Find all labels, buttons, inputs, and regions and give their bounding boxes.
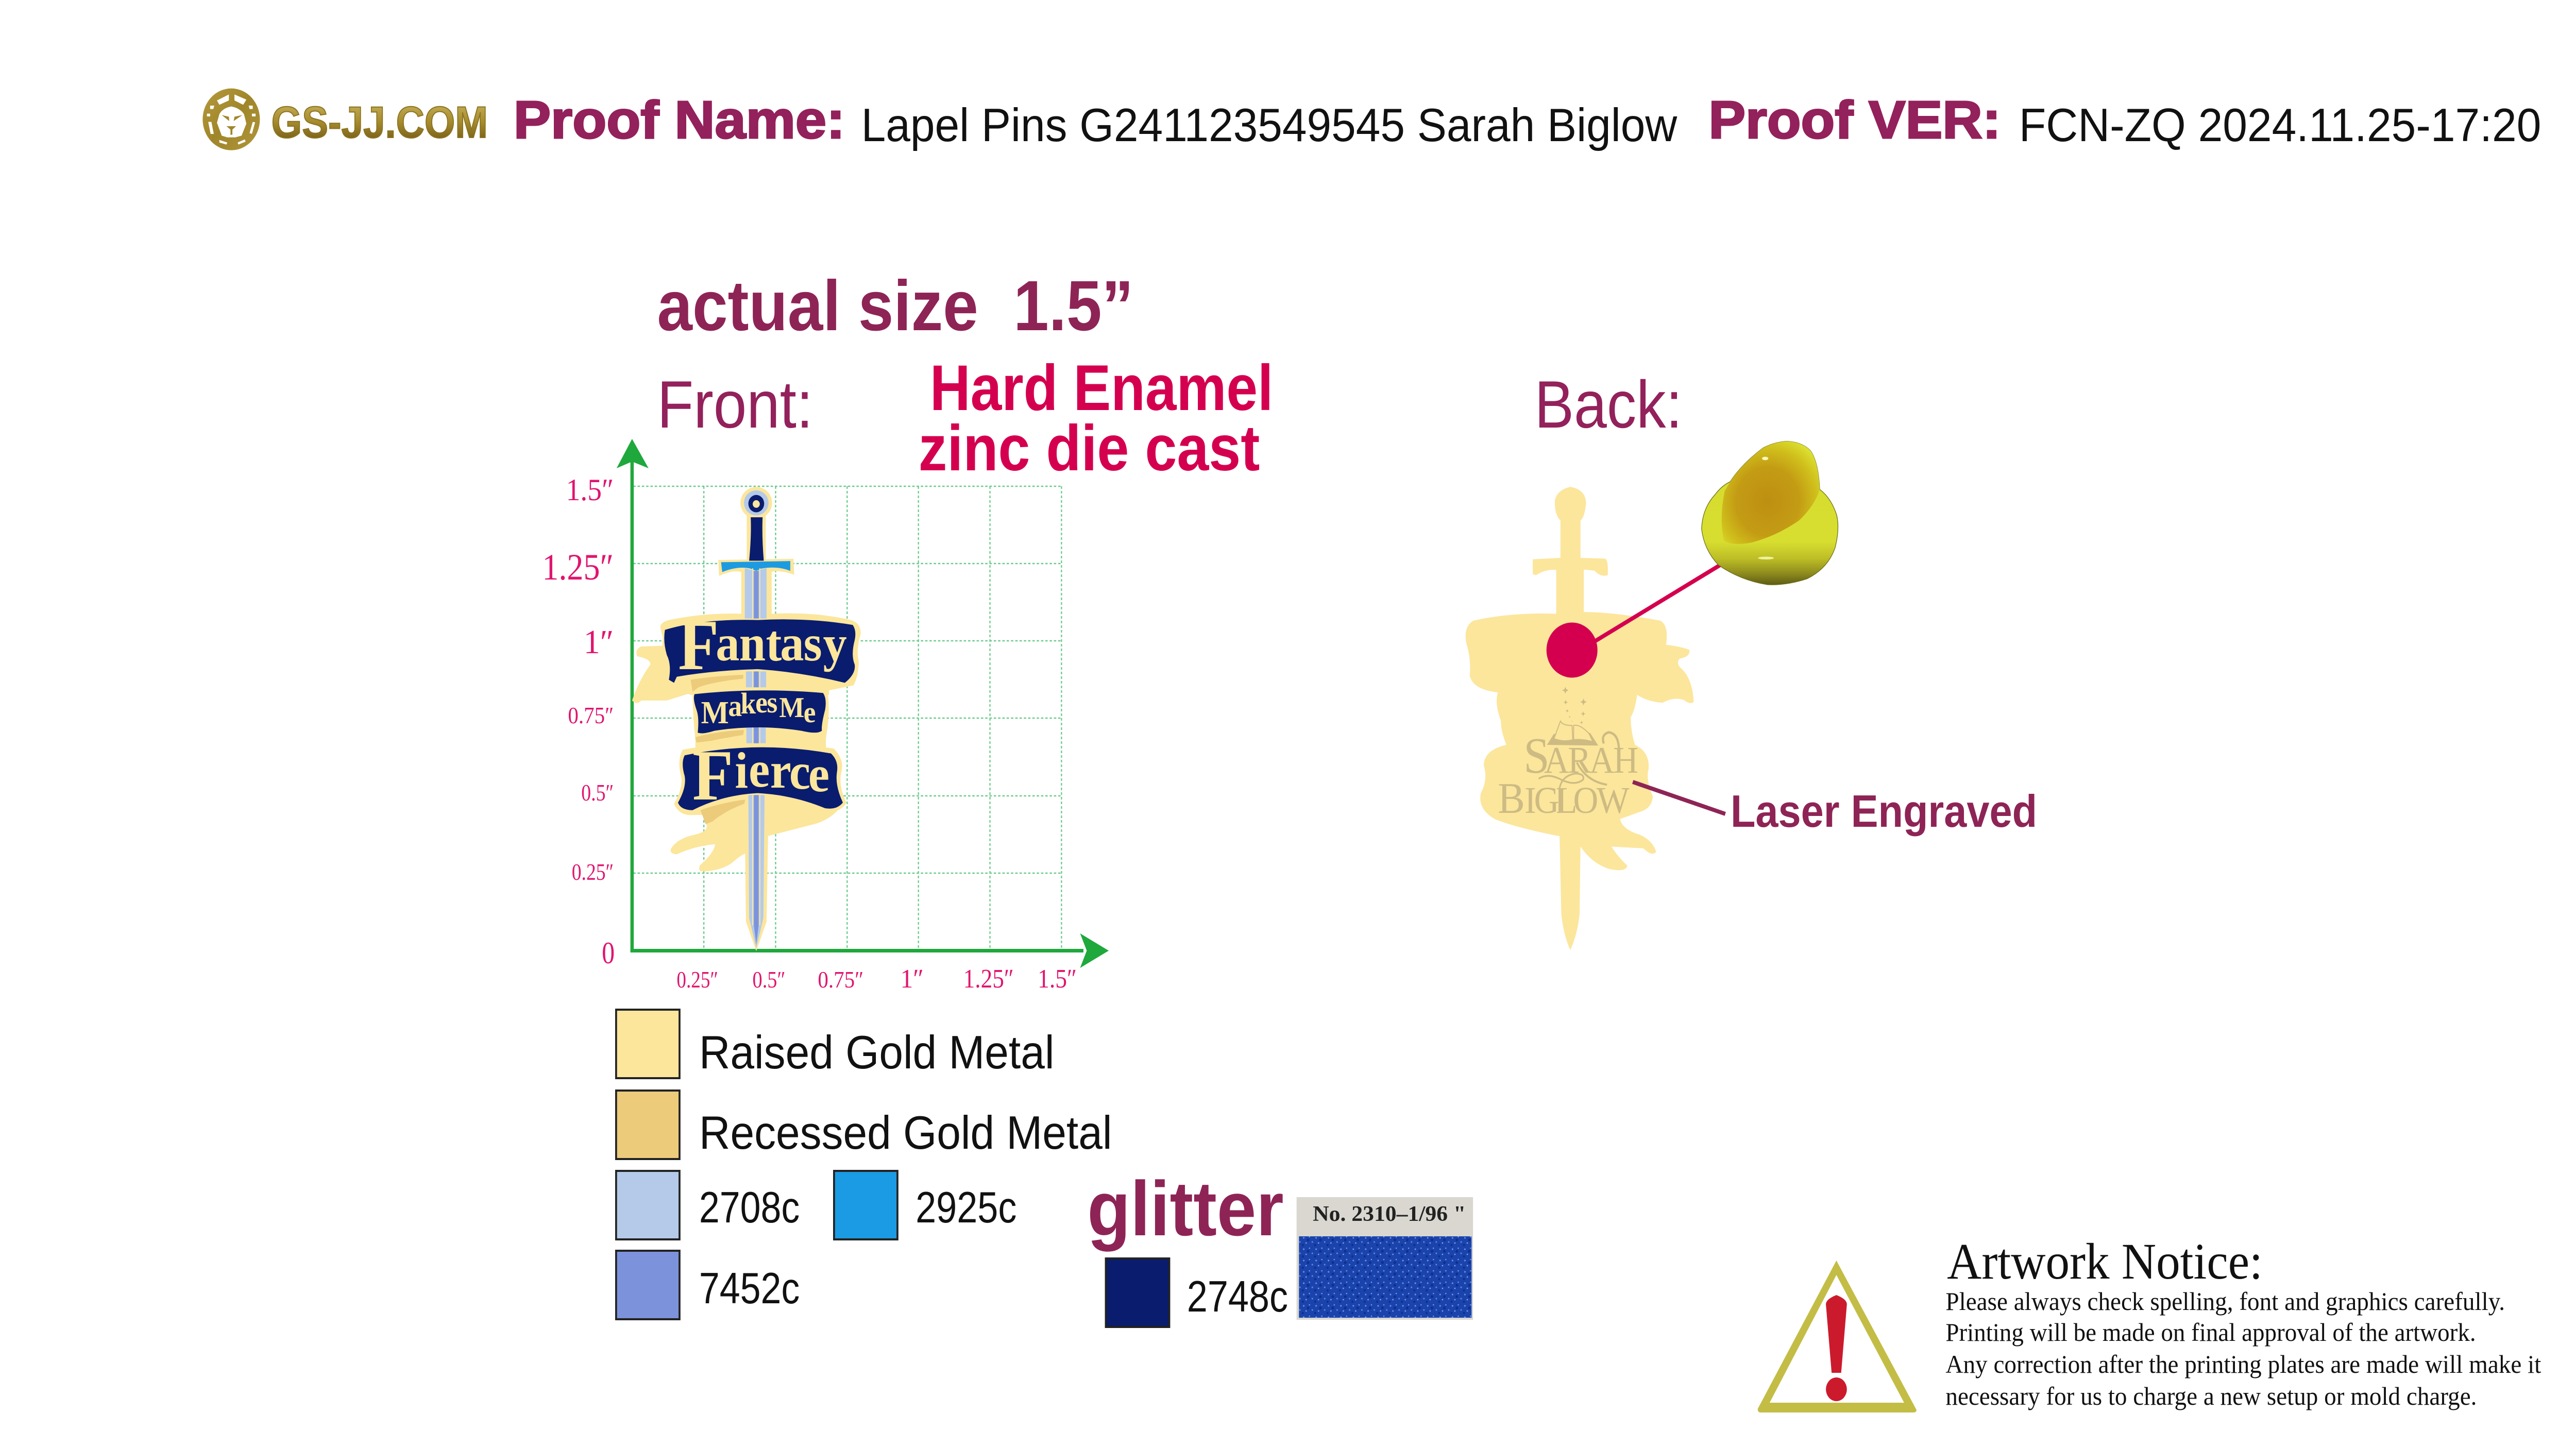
banner text: Makes Me: s [767, 686, 785, 719]
notice body text: Any correction after the printing plates are made will make it [1945, 1350, 2541, 1378]
notice body text: Please always check spelling, font and graphics carefully. [1945, 1287, 2505, 1316]
notice heading: Artwork Notice: [1947, 1233, 2263, 1290]
engraved name: Biglow: I [1524, 780, 1536, 822]
banner text: Fierce: i [735, 742, 748, 799]
y axis labels [542, 472, 615, 970]
engraved name: Biglow: O [1573, 780, 1598, 822]
sword crossguard [721, 561, 790, 572]
sword blade [745, 568, 767, 948]
swatch: 2748c: 2748c [1187, 1272, 1288, 1321]
sword grip [749, 517, 764, 560]
y axis labels: 0.5″ [581, 780, 614, 806]
banner text: Fantasy: a [780, 615, 804, 672]
sword pommel [744, 490, 769, 515]
y axis labels: 0.25″ [572, 860, 614, 885]
x axis labels: 1.5″ [1038, 963, 1077, 993]
notice body text: necessary for us to charge a new setup or mold charge. [1945, 1382, 2477, 1410]
banner text: Fierce: e [749, 741, 770, 798]
front pin artwork [632, 487, 861, 951]
glitter sample photo [1297, 1197, 1473, 1320]
swatch: 2748c [1106, 1258, 1288, 1327]
swatch: raised gold metal [616, 1010, 1054, 1079]
swatch: 7452c: 7452c [699, 1264, 800, 1313]
engraved name: Sarah: H [1613, 740, 1638, 781]
banner text: Fantasy: n [739, 615, 766, 672]
engraved name: Sarah: S [1523, 728, 1550, 784]
banner text: Makes Me: M [701, 695, 729, 730]
banner text: Fantasy: a [716, 615, 740, 672]
heading: hard enamel: Hard Enamel [930, 352, 1273, 424]
y axis labels: 1.25″ [542, 547, 614, 588]
y axis labels: 0 [602, 935, 615, 970]
engraved name: Biglow: G [1534, 780, 1559, 822]
chart axes [617, 439, 1109, 968]
swatch: 2708c: 2708c [699, 1183, 800, 1232]
engraved name: Biglow: L [1556, 780, 1577, 822]
proof name label: Proof Name: [514, 91, 845, 150]
swatch: 2708c [616, 1171, 800, 1239]
header bar [202, 89, 2541, 151]
swatch: recessed gold metal [616, 1091, 1112, 1159]
raised gold metal backing [632, 487, 861, 951]
x axis labels: 0.25″ [676, 967, 718, 993]
y axis labels: 1″ [584, 623, 614, 661]
heading: actual size: actual size 1.5” [657, 266, 1133, 346]
back pin artwork [1466, 441, 2037, 950]
back silhouette [1466, 487, 1693, 950]
swatch: 2925c [834, 1171, 1016, 1239]
x axis labels: 1.25″ [963, 963, 1014, 993]
y axis labels: 1.5″ [566, 472, 614, 507]
banner text: Fierce: F [692, 736, 733, 815]
swatch: recessed gold metal: Recessed Gold Metal [699, 1106, 1112, 1159]
notice body text: Printing will be made on final approval of the artwork. [1945, 1318, 2476, 1347]
size chart [542, 439, 1109, 993]
icon: yellow butterfly clutch [1702, 441, 1838, 585]
x axis labels: 0.5″ [753, 967, 785, 993]
laser engraved leader line [1633, 782, 1725, 814]
proof name value: Lapel Pins G241123549545 Sarah Biglow [861, 99, 1677, 151]
glitter sample photo: No. 2310–1/96 " [1313, 1202, 1466, 1225]
pin metal and enamel shapes [632, 487, 861, 951]
banner text: Makes Me: e [804, 696, 816, 729]
artwork notice [1758, 1233, 2541, 1412]
laser engraved label: Laser Engraved [1731, 786, 2037, 837]
banner text: Fierce: r [770, 742, 791, 799]
banner text: Makes Me: e [755, 686, 768, 719]
engraved name: Sarah: A [1544, 740, 1569, 781]
proof version value: FCN-ZQ 2024.11.25-17:20 [2019, 99, 2541, 151]
proof version label: Proof VER: [1708, 91, 2001, 150]
engraved name: Sarah: R [1568, 740, 1591, 781]
swatch: 7452c [616, 1251, 800, 1319]
banner text: Fantasy: F [678, 605, 719, 685]
banner text: Fantasy: t [766, 615, 782, 672]
pin post dot [1547, 622, 1598, 678]
swatch: raised gold metal: Raised Gold Metal [699, 1026, 1054, 1079]
icon: GS-JJ lion logo [202, 89, 260, 150]
banner text: Makes Me: M [779, 691, 804, 723]
banner text: Makes Me: k [740, 687, 756, 720]
engraved logo [1498, 687, 1638, 823]
x axis labels: 0.75″ [818, 967, 863, 993]
engraved stars, book and swashes [1539, 687, 1619, 813]
notice body text [1945, 1287, 2541, 1410]
x axis labels: 1″ [901, 963, 924, 993]
swatch: 2925c: 2925c [916, 1183, 1016, 1232]
heading: back: Back: [1535, 367, 1682, 442]
icon: warning triangle [1758, 1261, 1917, 1412]
glitter heading: glitter [1087, 1165, 1284, 1252]
banner text: Fierce: c [789, 743, 810, 800]
recessed gold metal strips [690, 675, 745, 824]
heading: front: Front: [657, 367, 813, 442]
logo wordmark: GS-JJ.COM [272, 97, 488, 147]
banner text: Fantasy: s [804, 615, 822, 672]
banner text: Makes Me: a [728, 690, 742, 723]
chart grid [633, 486, 1061, 951]
x axis labels [676, 963, 1077, 993]
banner text: Fantasy: y [823, 615, 847, 672]
navy banners [664, 619, 855, 810]
y axis labels: 0.75″ [568, 703, 614, 728]
engraved name: Sarah: A [1589, 740, 1615, 781]
banner text: Fierce: e [808, 745, 829, 803]
colour legend [616, 1010, 1473, 1327]
engraved name: Biglow: W [1597, 780, 1630, 822]
pin clutch connector line [1596, 565, 1720, 641]
engraved name: Biglow: B [1498, 774, 1525, 823]
heading: zinc die cast: zinc die cast [919, 412, 1260, 484]
